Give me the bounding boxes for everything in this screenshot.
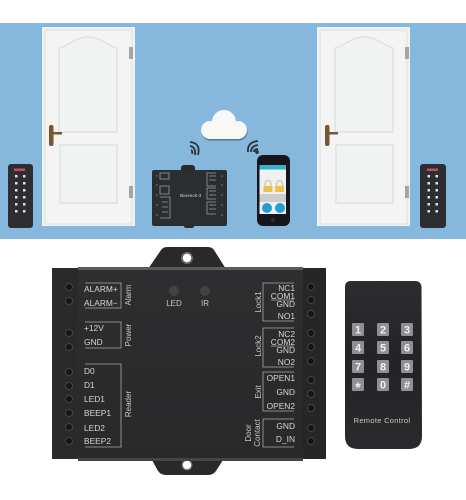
remote key digits: 2 [380,324,386,336]
remote key digits: * [355,379,361,395]
group labels rotated: Exit [254,385,263,399]
terminal labels: right: D_IN [276,434,295,444]
group labels rotated: Lock1 [254,291,263,313]
remote key digits: 7 [355,362,361,374]
terminal labels: left: +12V [84,323,104,333]
remote key digits: 0 [380,380,386,392]
small controller [152,165,227,228]
terminal labels: right: NC1 [278,283,295,293]
terminal labels: right [267,283,295,444]
remote key digits: 8 [380,362,386,374]
LED and IR labels: IR [201,299,209,308]
terminal labels: right: GND [276,299,295,309]
remote label: Remote Control [354,416,410,425]
terminal labels: right: COM2 [271,337,295,347]
LED indicators [169,286,210,296]
remote control [345,281,422,449]
controller: main body [52,267,326,461]
banner background [0,23,466,239]
controller: mounting tabs [148,247,226,475]
remote keys [352,323,413,391]
group labels rotated: Reader [124,391,133,417]
icon: wifi signal right [248,141,258,153]
terminal screws [66,284,314,444]
terminal labels: right: GND [276,387,295,397]
group labels rotated: Door [244,424,253,442]
remote key digits: 4 [355,342,362,354]
terminal labels: right: OPEN2 [267,401,295,411]
terminal labels: left: D1 [84,380,95,390]
terminal labels: right: GND [276,421,295,431]
terminal labels: right: COM1 [271,291,295,301]
terminal labels: right: GND [276,345,295,355]
keypad: left reader [8,164,33,228]
mounting holes [181,252,193,470]
terminal labels: left: ALARM+ [84,284,118,294]
remote key digits: 9 [404,362,410,374]
terminal labels: left: LED1 [84,394,105,404]
phone buttons [262,203,285,213]
terminal labels: left: ALARM− [84,298,118,308]
bracket outlines [85,283,294,447]
terminal labels: left: GND [84,337,103,347]
terminal labels: right: NO1 [278,311,295,321]
terminal labels: right: NO2 [278,357,295,367]
remote key digits: 5 [380,342,386,354]
LED and IR labels: LED [166,299,182,308]
keypad: right reader [420,164,446,228]
phone [257,155,290,226]
LED and IR labels [166,299,209,308]
icon: wifi signal left [190,142,199,155]
remote key digits: 6 [404,342,410,354]
terminal labels: left: D0 [84,366,95,376]
remote key digits: 3 [404,324,410,336]
remote key digits [355,324,410,395]
terminal labels: right: OPEN1 [267,373,295,383]
cloud icon [201,110,248,140]
terminal labels: right: NC2 [278,329,295,339]
door: left [42,27,135,226]
group labels rotated: Contact [253,418,262,447]
remote key digits: # [404,380,410,392]
small controller label: Bioseck-3 [180,193,202,198]
terminal labels: left: LED2 [84,423,105,433]
group labels rotated: Lock2 [254,335,263,357]
remote key digits: 1 [355,324,361,336]
group labels rotated [124,284,263,447]
terminal labels: left: BEEP1 [84,408,111,418]
group labels rotated: Power [124,323,133,346]
door: right [317,27,410,226]
group labels rotated: Alarm [124,284,133,305]
padlock icons [264,180,284,192]
terminal labels: left [84,284,118,446]
terminal labels: left: BEEP2 [84,436,111,446]
